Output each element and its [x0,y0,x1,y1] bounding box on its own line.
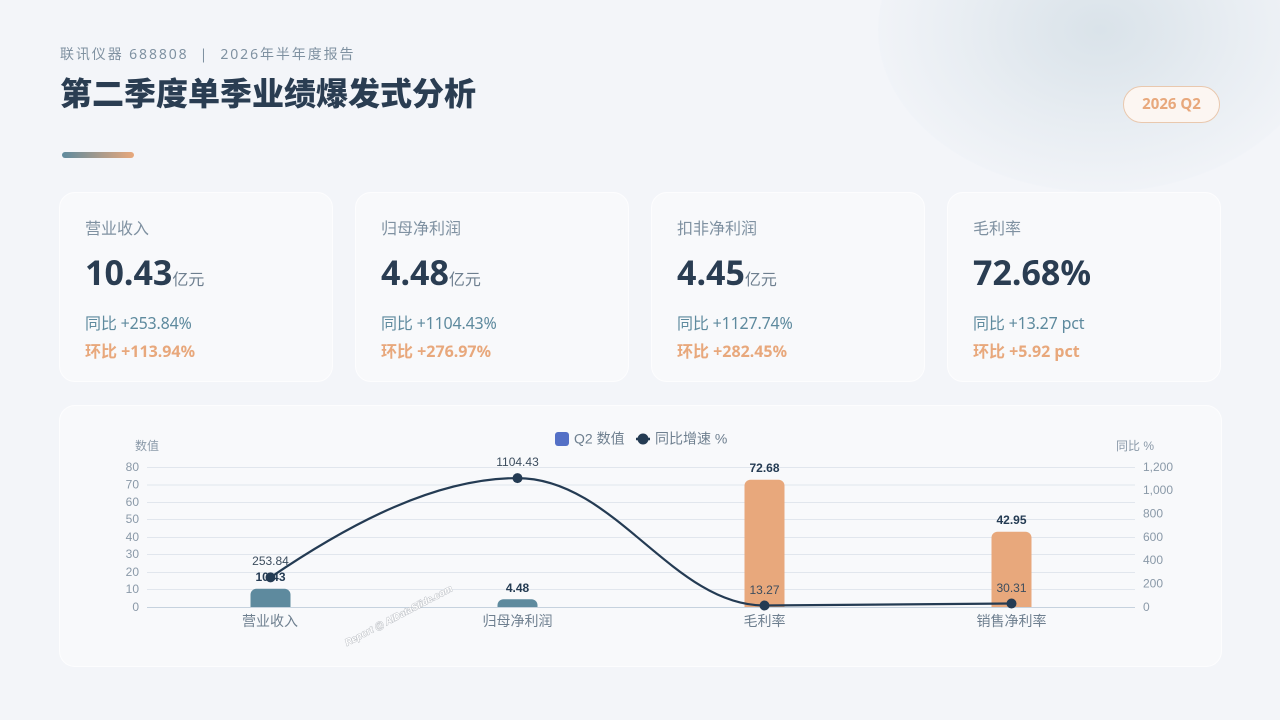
accent bar [62,152,134,158]
bar value labels: 10.43 [255,570,286,584]
value: 4.45亿元 [677,249,777,295]
category labels [242,613,1046,629]
panel: 归母净利润 [355,192,629,382]
subtitle: 联讯仪器 688808 | 2026年半年度报告 [60,45,355,64]
category labels: 毛利率 [744,613,786,629]
legend label: 同比增速: 同比增速 % [655,430,727,446]
value: 10.43亿元 [85,249,204,295]
right axis: 600 [1143,530,1163,544]
year on year: 同比 +1104.43% [381,312,497,334]
badge: 2026 Q2 [1123,86,1220,123]
bar value labels: 4.48 [506,581,530,595]
line value labels: 30.31 [996,581,1027,595]
left axis: 数值 [135,438,159,453]
category labels: 销售净利率 [976,613,1046,629]
right axis: 400 [1143,553,1163,567]
left axis: 0 [132,600,139,614]
year on year: 同比 +13.27 pct [973,312,1084,334]
left axis: 40 [126,530,139,544]
label: 毛利率 [973,217,1021,239]
left axis: 70 [126,478,139,492]
bar value labels [255,461,1027,595]
bars [250,480,1032,607]
quarter on quarter: 环比 +5.92 pct [973,340,1080,362]
left axis: 80 [126,460,139,474]
panel: 营业收入 [59,192,333,382]
value: 72.68% [973,249,1091,295]
right axis: 1,000 [1143,483,1173,497]
left axis: 20 [126,565,139,579]
legend marker: 同比增速 [636,434,650,444]
line value labels [252,455,1027,597]
label: 扣非净利润 [677,217,757,239]
label: 归母净利润 [381,217,461,239]
right axis: 1,200 [1143,460,1173,474]
left axis [126,438,159,614]
badge: 2026 Q2: 2026 Q2 [1142,94,1201,114]
growth line [266,473,1016,610]
label: 营业收入 [85,217,149,239]
right axis [1116,439,1173,614]
right axis: 800 [1143,506,1163,520]
title: 第二季度单季业绩爆发式分析 [60,72,476,115]
category labels: 归母净利润 [482,613,552,629]
right axis: 同比 % [1116,439,1154,453]
left axis: 50 [126,512,139,526]
right axis: 0 [1143,600,1150,614]
bar value labels: 42.95 [996,513,1027,527]
year on year: 同比 +253.84% [85,312,192,334]
panel: 扣非净利润 [651,192,925,382]
line value labels: 13.27 [749,583,780,597]
legend label: Q2 数值: Q2 数值 [574,430,625,446]
panel: 毛利率 [947,192,1221,382]
value: 4.48亿元 [381,249,481,295]
quarter on quarter: 环比 +113.94% [85,340,195,362]
legend [555,430,727,446]
watermark: Report @ AIDataSlide.com [343,583,455,649]
left axis: 60 [126,495,139,509]
right axis: 200 [1143,576,1163,590]
panel: combo chart [59,405,1222,667]
left axis: 10 [126,582,139,596]
line value labels: 1104.43 [496,455,539,469]
year on year: 同比 +1127.74% [677,312,793,334]
category labels: 营业收入 [242,613,298,629]
quarter on quarter: 环比 +276.97% [381,340,491,362]
left axis: 30 [126,547,139,561]
quarter on quarter: 环比 +282.45% [677,340,787,362]
bar value labels: 72.68 [749,461,780,475]
legend swatch: Q2 数值 [555,432,569,446]
line value labels: 253.84 [252,554,289,568]
